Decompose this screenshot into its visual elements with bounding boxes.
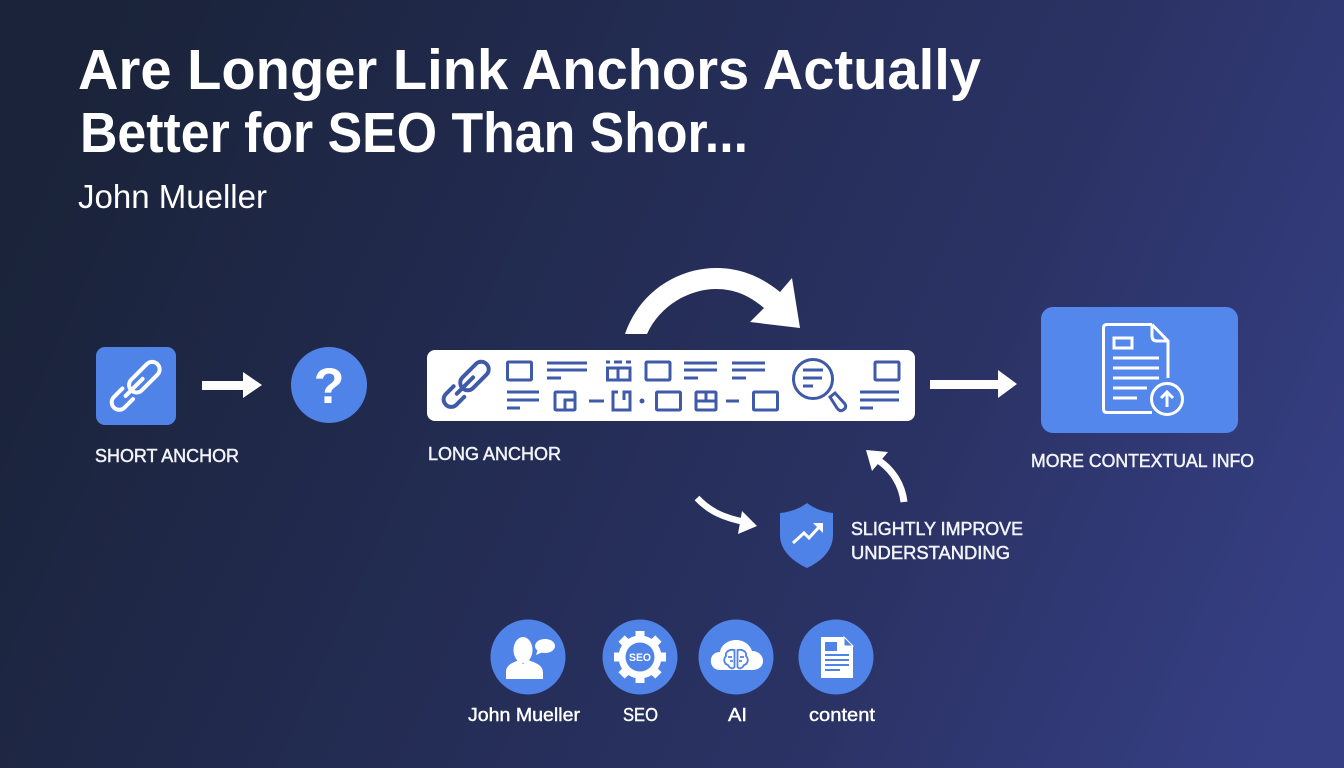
- topic: SEO: SEO: [623, 704, 658, 725]
- title: Are Longer Link Anchors Actually: [78, 38, 981, 102]
- text: slightly improve understanding: SLIGHTLY IMPROVE: [851, 518, 1023, 539]
- icon: magnifier: [794, 360, 846, 411]
- icon: word blocks second row: [507, 392, 778, 410]
- arrow: short anchor to question: [202, 372, 262, 398]
- topic: SEO: [602, 620, 678, 725]
- icon: document with upload: [1104, 324, 1182, 414]
- icon: question mark: ?: [314, 358, 344, 414]
- panel: short anchor: [95, 347, 367, 466]
- text: slightly improve understanding: [851, 518, 1023, 563]
- title: Better for SEO Than Shor...: [80, 101, 748, 165]
- icon: word blocks right: [860, 362, 899, 408]
- arrow: shield up to bar: [866, 450, 904, 502]
- topic: John Mueller: John Mueller: [468, 704, 580, 725]
- arrow: large curved arrow: [625, 268, 800, 334]
- topic: content: content: [809, 704, 875, 725]
- label: long anchor: LONG ANCHOR: [428, 443, 561, 464]
- text: slightly improve understanding: UNDERSTANDING: [851, 542, 1010, 563]
- topic: AI: AI: [728, 704, 747, 725]
- title: [78, 38, 981, 165]
- topic: AI: [698, 620, 774, 725]
- icon: chain link: [441, 359, 492, 410]
- arrow: bar to contextual info: [930, 370, 1017, 398]
- icon: question mark: [291, 347, 367, 423]
- icon: short anchor link: [96, 347, 176, 425]
- label: more contextual info: MORE CONTEXTUAL INFO: [1031, 450, 1254, 471]
- topic: John Mueller: [468, 620, 580, 725]
- panel: long anchor bar: [427, 350, 915, 421]
- arrow: towards shield: [697, 498, 757, 534]
- subtitle: author: John Mueller: [78, 178, 267, 215]
- label: short anchor: SHORT ANCHOR: [95, 445, 239, 466]
- topic: content: [798, 620, 875, 725]
- topic: SEO: SEO: [629, 652, 651, 664]
- panel: more contextual info: [1031, 307, 1254, 471]
- icon: word blocks first row: [508, 362, 765, 380]
- icon: shield with trend: [780, 503, 833, 568]
